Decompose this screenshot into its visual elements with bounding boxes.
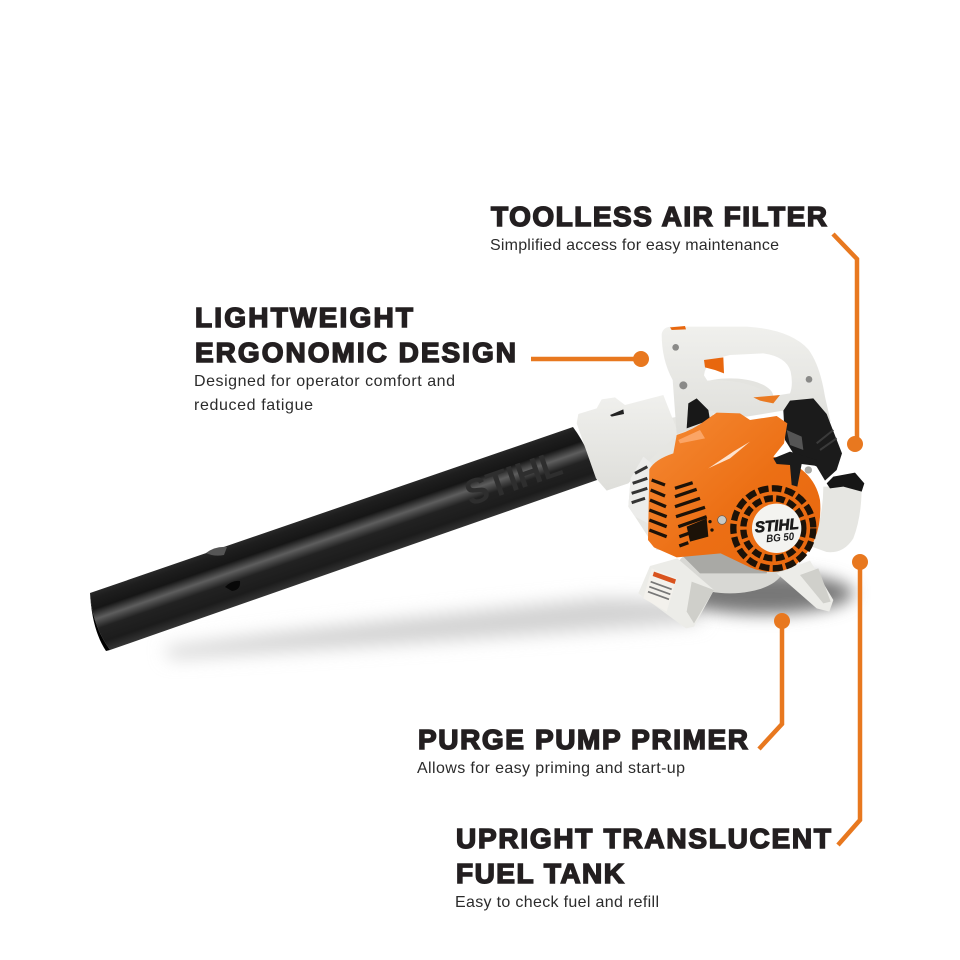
air filter [783, 398, 842, 481]
fan housing [677, 543, 783, 593]
heading line one: LIGHTWEIGHT [195, 302, 413, 333]
fuel tank [812, 487, 862, 552]
marker dot [774, 613, 790, 629]
marker dot [847, 436, 863, 452]
heading: TOOLLESS AIR FILTER [491, 201, 827, 232]
bolt [718, 516, 726, 524]
rear body [628, 410, 713, 550]
ground shadow [165, 598, 700, 658]
logo text: STIHL [754, 516, 799, 537]
handle screws [672, 344, 679, 351]
blower product illustration [90, 326, 864, 651]
side vent grille [628, 457, 652, 523]
callout: lightweight design [194, 302, 649, 414]
callout: purge pump primer [417, 613, 790, 777]
vent dots [708, 520, 712, 523]
description: Easy to check fuel and refill [455, 894, 659, 911]
neck [577, 395, 678, 491]
starter grip [773, 452, 817, 487]
description: Designed for operator comfort and [194, 373, 455, 390]
handle [662, 327, 831, 434]
feet [638, 558, 714, 628]
description second line: reduced fatigue [194, 397, 313, 414]
logo disc [752, 504, 801, 553]
black inner part [687, 398, 710, 428]
callout: upright translucent fuel tank [455, 554, 868, 911]
blower engine [577, 326, 864, 628]
starter recoil grille [733, 488, 813, 568]
trigger [704, 357, 724, 373]
center vent opening [687, 518, 708, 542]
callout: toolless air filter [490, 201, 863, 452]
marker dot [633, 351, 649, 367]
description: Simplified access for easy maintenance [490, 237, 779, 254]
blower engine: BG 50 [766, 531, 795, 545]
leader line [838, 562, 860, 845]
leader line [531, 357, 640, 361]
orange cover [648, 413, 820, 572]
heading: PURGE PUMP PRIMER [418, 724, 748, 755]
cover vents [649, 480, 707, 546]
warning label [643, 568, 677, 612]
leader line [833, 234, 857, 443]
marker dot [852, 554, 868, 570]
heading line two: FUEL TANK [456, 858, 624, 889]
heading line one: UPRIGHT TRANSLUCENT [456, 823, 831, 854]
heading line two: ERGONOMIC DESIGN [195, 337, 516, 368]
tube embossed brand: STIHL [459, 442, 567, 514]
description: Allows for easy priming and start-up [417, 760, 685, 777]
leader line [759, 621, 782, 749]
blower tube [90, 427, 597, 651]
cover highlights [708, 442, 750, 468]
dark shadow under engine [673, 573, 853, 614]
